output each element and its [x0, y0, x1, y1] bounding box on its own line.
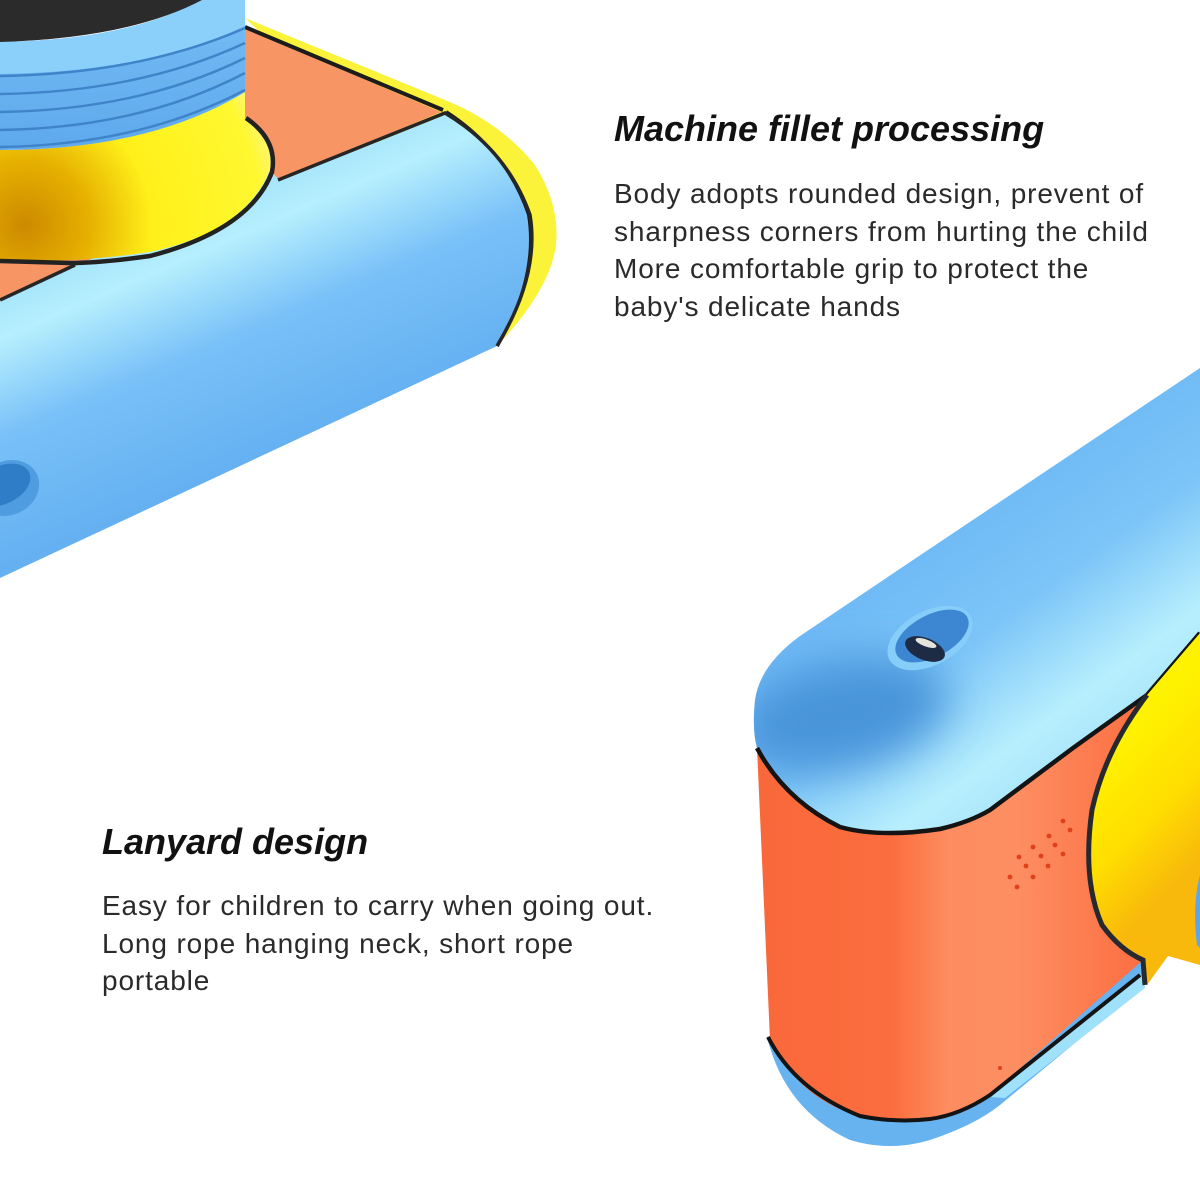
black base outline	[0, 118, 273, 263]
top-left camera close-up	[0, 0, 557, 578]
bottom-right camera close-up	[721, 368, 1200, 1146]
body copy: carrying: Easy for children to carry when going out.	[102, 890, 654, 921]
blue underside	[767, 960, 1145, 1146]
body copy: rounded design: More comfortable grip to protect the	[614, 253, 1089, 284]
yellow back shell	[245, 18, 557, 346]
body copy: carrying	[102, 890, 654, 996]
body copy: rounded design: baby's delicate hands	[614, 290, 901, 322]
speaker holes	[998, 819, 1072, 1070]
body copy: rounded design: Body adopts rounded design, prevent of	[614, 178, 1144, 209]
blue camera body	[0, 115, 529, 578]
blue lens sliver	[1195, 875, 1200, 948]
blue body seam	[0, 113, 532, 346]
text block: machine fillet processing	[614, 108, 1149, 322]
top surface shadow	[721, 638, 959, 792]
black seam, top surface	[757, 633, 1200, 833]
black seam lines	[245, 27, 529, 346]
lanyard slot with metal pin	[877, 593, 983, 683]
orange side panel	[757, 695, 1147, 1120]
body copy: rounded design: sharpness corners from hurting the child	[614, 216, 1149, 246]
body copy: carrying: Long rope hanging neck, short rope	[102, 928, 574, 958]
heading: machine fillet processing: Machine fillet processing	[614, 108, 1044, 149]
lanyard slot, left camera	[0, 450, 48, 526]
body copy: rounded design	[614, 178, 1149, 322]
heading: lanyard design: Lanyard design	[102, 821, 368, 862]
orange panel seam	[768, 975, 1140, 1120]
text block: lanyard design	[102, 821, 654, 996]
black lens	[0, 0, 202, 42]
yellow lens base	[1089, 633, 1200, 985]
body copy: carrying: portable	[102, 965, 210, 996]
yellow lens base	[0, 90, 272, 261]
blue top surface	[754, 368, 1200, 833]
orange panel	[0, 28, 441, 300]
black seam around lens base	[1089, 695, 1147, 985]
ribbed blue lens barrel	[0, 0, 245, 150]
